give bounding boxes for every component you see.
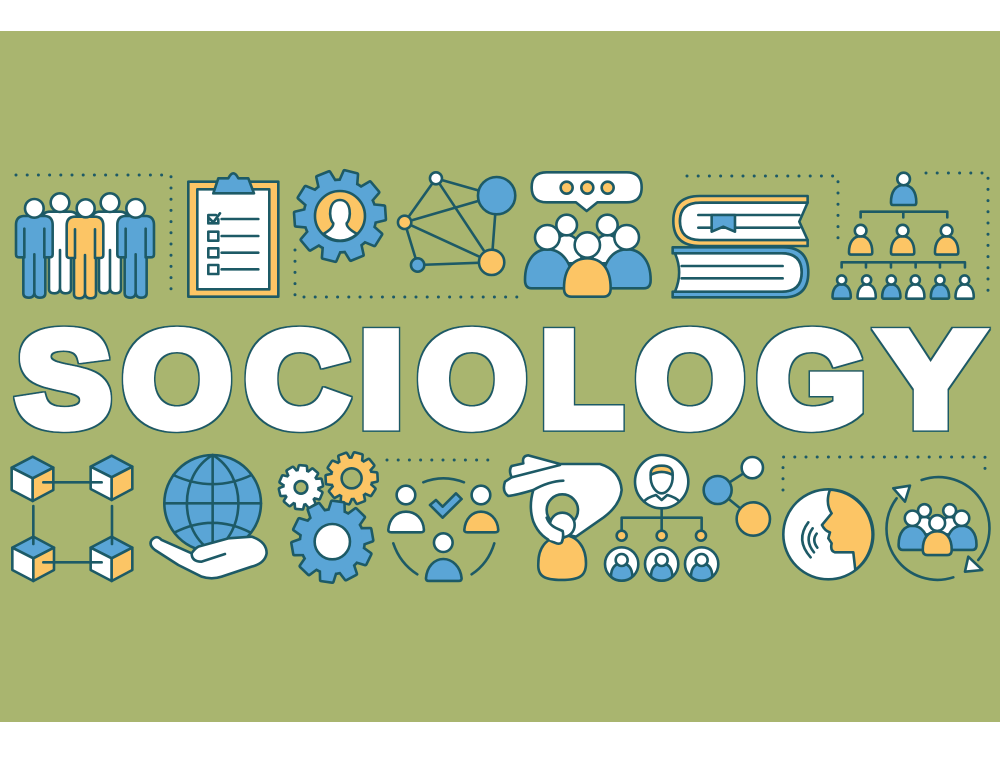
icon: person org chart bbox=[605, 455, 718, 581]
icon: speaking face in profile bbox=[783, 489, 873, 579]
title: L bbox=[540, 305, 622, 454]
icon: molecule of three circles bbox=[704, 457, 770, 536]
title: O bbox=[418, 305, 527, 454]
dotted frame: bottom right bbox=[783, 457, 985, 490]
dotted frame: centre top bbox=[295, 250, 522, 297]
icon: three gears bbox=[278, 448, 382, 586]
icon: four connected cubes bbox=[12, 456, 132, 581]
title: C bbox=[245, 305, 348, 454]
title: S bbox=[17, 305, 111, 454]
title: Y bbox=[879, 305, 982, 454]
icon: gear with person portrait bbox=[286, 162, 394, 270]
icon: organisation hierarchy bbox=[833, 173, 974, 299]
title: O bbox=[636, 305, 745, 454]
title: I bbox=[359, 305, 404, 454]
icon: crowd inside a circular cycle bbox=[886, 477, 989, 580]
icon: group consensus with check mark bbox=[388, 478, 498, 581]
dotted line: bottom centre bbox=[387, 458, 498, 462]
icon: globe held in hand bbox=[151, 455, 267, 578]
icon: clipboard checklist bbox=[188, 173, 278, 297]
icon: stack of two books bbox=[673, 196, 808, 297]
dotted frame: top left bbox=[16, 175, 171, 294]
dotted frame: books bbox=[687, 176, 838, 242]
icon: hand picking up a person bbox=[504, 455, 622, 580]
dotted frame: top right bbox=[926, 173, 988, 295]
icon: group of five standing people bbox=[16, 193, 154, 298]
icon: network of nodes bbox=[398, 172, 515, 275]
title: O bbox=[123, 305, 232, 454]
icon: crowd with speech bubble bbox=[525, 172, 651, 297]
title: G bbox=[757, 305, 866, 454]
